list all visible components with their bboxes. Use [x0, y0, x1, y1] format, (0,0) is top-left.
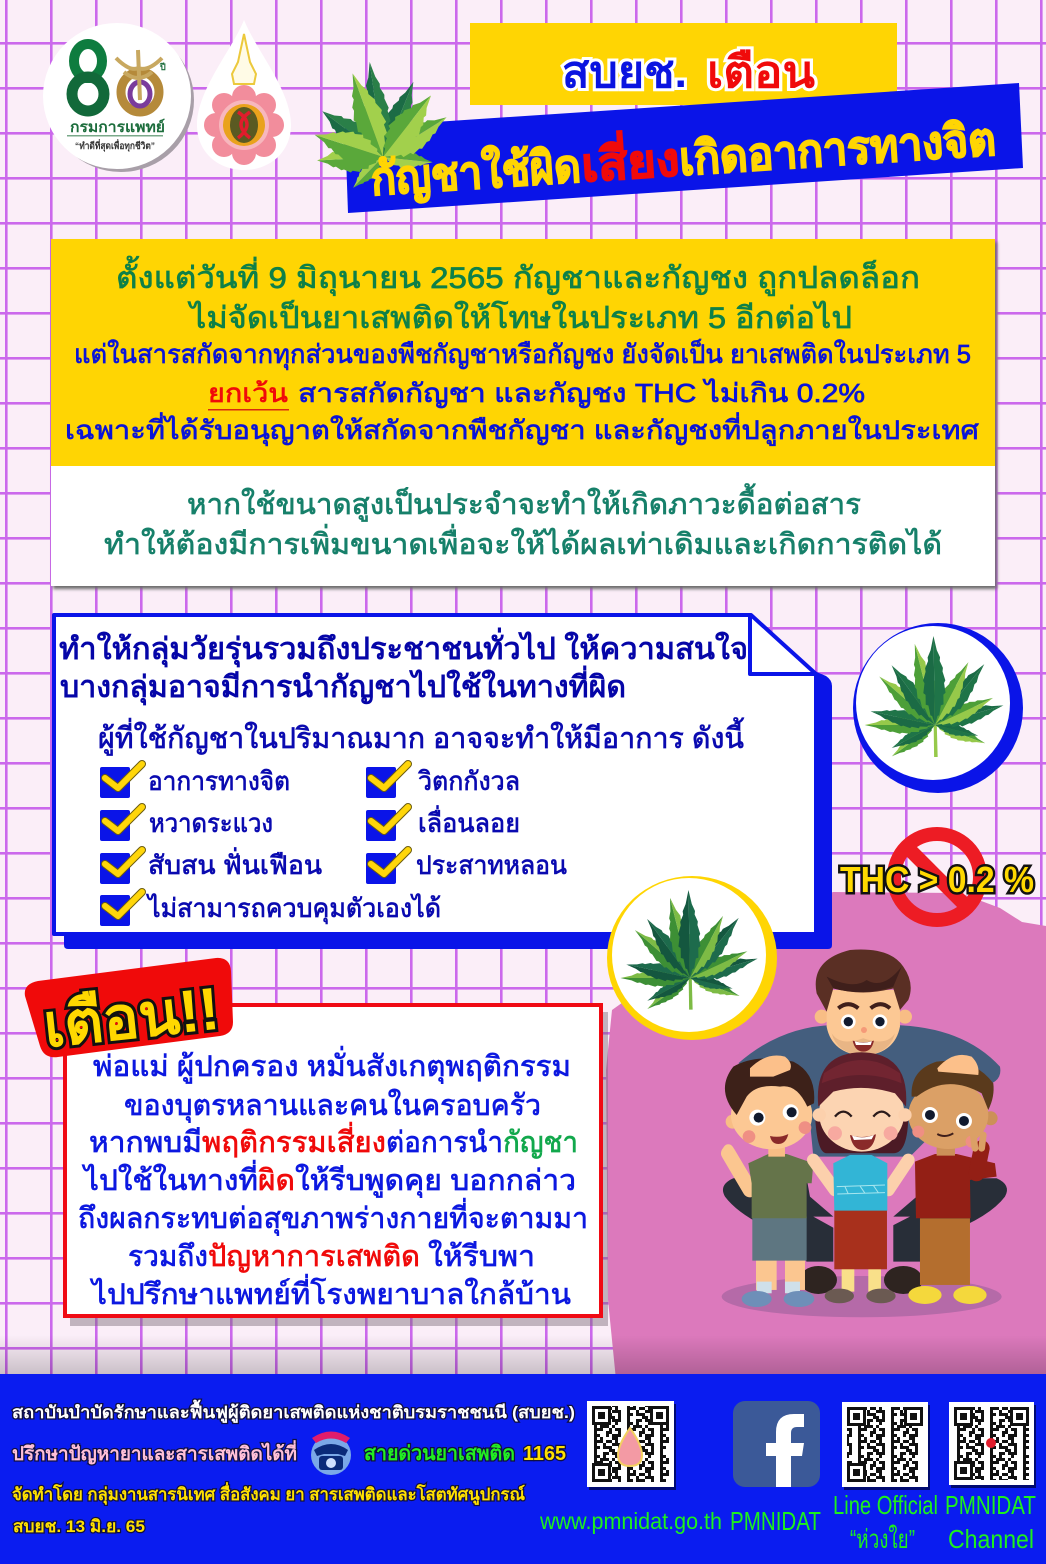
logo: department of medical services 80 years: กรมการแพทย์: [70, 118, 165, 136]
icon: header cannabis leaf: [310, 60, 454, 193]
footer: channel word: Channel: [948, 1524, 1034, 1554]
bottom shade above footer: [0, 1335, 1046, 1375]
panel: legal status: ยกเว้น: [208, 378, 288, 408]
heading: blue slanted banner: [345, 83, 1023, 213]
symptom: hallucination: ประสาทหลอน: [416, 850, 567, 880]
heading: main title: [369, 107, 997, 206]
pink brush background: [606, 892, 1046, 1380]
panel: legal status: สารสกัดกัญชา และกัญชง THC ไม่เกิน 0.2%: [298, 378, 865, 408]
footer band: [0, 1374, 1046, 1564]
heading: yellow banner: สบยช.: [562, 48, 687, 97]
boy right: [908, 1055, 998, 1304]
icon: facebook: [733, 1401, 820, 1487]
icon: prohibition sign with THC label: [840, 834, 1034, 920]
QR code: channel: [949, 1402, 1036, 1488]
symptom: hallucination: [366, 850, 567, 884]
panel: tolerance warning: หากใช้ขนาดสูงเป็นประจำจะทำให้เกิดภาวะดื้อต่อสาร: [187, 483, 861, 522]
heading: main title: เกิดอาการทางจิต: [678, 113, 997, 185]
panel: parent warning: ปัญหาการเสพติด: [208, 1241, 420, 1273]
logo: department of medical services 80 years: “ทำดีที่สุดเพื่อทุกชีวิต”: [75, 138, 155, 152]
heading: main title: กัญชาใช้ผิด: [369, 139, 582, 206]
footer: date: สบยช. 13 มิ.ย. 65: [13, 1517, 145, 1536]
panel: symptoms note: บางกลุ่มอาจมีการนำกัญชาไปใช้ในทางที่ผิด: [60, 665, 626, 706]
panel: symptoms note: ผู้ที่ใช้กัญชาในปริมาณมาก อาจจะทำให้มีอาการ ดังนี้: [98, 717, 744, 756]
panel: legal status: ตั้งแต่วันที่ 9 มิถุนายน 2565 กัญชาและกัญชง ถูกปลดล็อก: [116, 256, 920, 297]
panel: parent warning: ไปปรึกษาแพทย์ที่โรงพยาบาลใกล้บ้าน: [90, 1274, 571, 1311]
girl: [813, 1052, 912, 1303]
illustration: father and children: [722, 950, 1007, 1317]
symptom: confusion: สับสน ฟั่นเฟือน: [148, 847, 322, 880]
panel: symptoms note: [54, 615, 832, 949]
logo: department of medical services 80 years: [43, 23, 194, 172]
panel: legal status: [51, 239, 997, 589]
panel: tolerance warning: ทำให้ต้องมีการเพิ่มขนาดเพื่อจะให้ได้ผลเท่าเดิมและเกิดการติดได้: [104, 524, 942, 561]
panel: parent warning: พ่อแม่ ผู้ปกครอง หมั่นสังเกตุพฤติกรรม: [93, 1046, 571, 1084]
symptom: absent-mindedness: เลื่อนลอย: [418, 805, 520, 838]
footer: institute name: สถาบันบำบัดรักษาและฟื้นฟูผู้ติดยาเสพติดแห่งชาติบรมราชชนนี (สบยช.): [12, 1399, 575, 1424]
callout: warning tag: เตือน!!: [40, 975, 222, 1060]
footer: line label: Line Official: [833, 1490, 938, 1520]
panel: parent warning: ให้รีบพูดคุย บอกกล่าว: [295, 1163, 576, 1198]
panel: legal status: เฉพาะที่ได้รับอนุญาตให้สกัดจากพืชกัญชา และกัญชงที่ปลูกภายในประเทศ: [65, 412, 980, 446]
panel: legal status: แต่ในสารสกัดจากทุกส่วนของพืชกัญชาหรือกัญชง ยังจัดเป็น ยาเสพติดในประเภท 5: [74, 338, 971, 370]
symptom: absent-mindedness: [366, 805, 520, 841]
heading: yellow banner: [470, 23, 897, 105]
boy left: [722, 1055, 814, 1307]
panel: parent warning: [65, 1005, 608, 1326]
panel: parent warning: ถึงผลกระทบต่อสุขภาพร่างกายที่จะตามมา: [78, 1198, 588, 1236]
footer: website label: www.pmnidat.go.th: [539, 1508, 722, 1534]
panel: parent warning: ผิด: [258, 1165, 295, 1197]
QR code: line official: [842, 1402, 930, 1490]
icon: hotline phone: [311, 1432, 351, 1475]
QR code: website: [587, 1401, 676, 1490]
heading: main title: เสี่ยง: [579, 127, 681, 191]
panel: parent warning: กัญชา: [503, 1127, 578, 1159]
icon: prohibition sign with THC label: THC > 0.2 %: [840, 859, 1034, 900]
symptom: loss of self control: ไม่สามารถควบคุมตัวเองได้: [146, 893, 441, 924]
icon: leaf in blue circle: [853, 623, 1023, 793]
panel: legal status: ไม่จัดเป็นยาเสพติดให้โทษในประเภท 5 อีกต่อไป: [188, 299, 852, 335]
symptom: psychosis: [100, 764, 290, 798]
footer: line name: “ห่วงใย”: [850, 1524, 915, 1554]
symptom: confusion: [100, 847, 322, 884]
symptom: psychosis: อาการทางจิต: [148, 766, 290, 796]
heading: yellow banner: เตือน: [707, 48, 815, 97]
panel: parent warning: ของบุตรหลานและคนในครอบครัว: [124, 1088, 541, 1123]
panel: parent warning: ให้รีบพา: [428, 1239, 535, 1273]
symptom: anxiety: [366, 764, 520, 798]
footer: hotline number: 1165: [523, 1443, 566, 1465]
panel: parent warning: หากพบมี: [89, 1127, 202, 1159]
panel: parent warning: พฤติกรรมเสี่ยง: [202, 1122, 386, 1159]
logo: institute teardrop emblem: [197, 20, 291, 170]
father: [723, 950, 1007, 1294]
symptom: paranoia: [100, 807, 273, 841]
footer: consult line: ปรึกษาปัญหายาและสารเสพติดได้ที่: [12, 1440, 297, 1465]
footer: hotline number: สายด่วนยาเสพติด: [364, 1443, 515, 1465]
panel: parent warning: ต่อการนำ: [386, 1127, 503, 1159]
symptom: anxiety: วิตกกังวล: [418, 766, 520, 796]
symptom: paranoia: หวาดระแวง: [149, 808, 273, 838]
footer: credit: จัดทำโดย กลุ่มงานสารนิเทศ สื่อสังคม ยา สารเสพติดและโสตทัศนูปกรณ์: [12, 1482, 525, 1506]
logo: department of medical services 80 years: ปี: [159, 62, 166, 72]
icon: leaf in yellow circle: [607, 876, 777, 1040]
footer: facebook label: PMNIDAT: [730, 1506, 821, 1536]
panel: symptoms note: ทำให้กลุ่มวัยรุ่นรวมถึงประชาชนทั่วไป ให้ความสนใจ: [59, 627, 748, 668]
panel: parent warning: ไปใช้ในทางที่: [82, 1160, 258, 1197]
panel: parent warning: รวมถึง: [128, 1241, 208, 1273]
panel: tolerance warning: [51, 466, 995, 586]
